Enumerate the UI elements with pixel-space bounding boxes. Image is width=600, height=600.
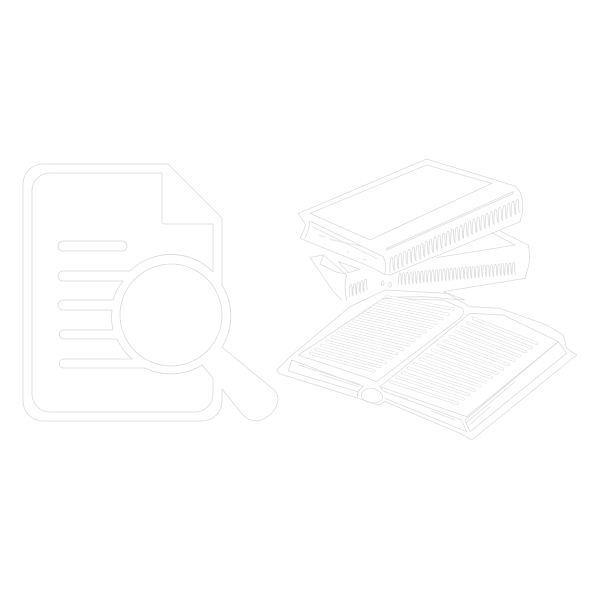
fore-edge lettering [467, 382, 515, 424]
left page outline [298, 298, 463, 382]
top book cover panel [310, 165, 492, 240]
icon: document with magnifying glass [23, 164, 278, 421]
top book page edges [390, 199, 520, 273]
lower book spine fragment [387, 297, 463, 300]
top book spine lettering [313, 227, 377, 260]
edge lettering [298, 365, 455, 420]
top book cover edge strip [387, 192, 513, 250]
left page text lines [311, 297, 453, 371]
top book spine outline [305, 221, 386, 273]
open book binding loop [288, 360, 467, 432]
left page text line centres [311, 297, 453, 371]
icon: lower closed book [310, 231, 529, 300]
right page text line centres [391, 318, 537, 403]
magnifier lens [120, 264, 222, 366]
right page text lines [391, 318, 537, 403]
document outer outline with magnifier handle [23, 164, 278, 421]
heading line pill [58, 241, 127, 251]
right page outline [380, 313, 558, 417]
lower book page edges [349, 263, 516, 297]
icon: open book [277, 290, 577, 440]
top book outline [298, 159, 523, 275]
open book fore-edge pages [465, 342, 567, 432]
document inner outline with text lines [32, 173, 213, 412]
icon: closed book on top of stack [298, 159, 523, 275]
open book outer outline [277, 290, 577, 440]
lower book outline [310, 231, 529, 300]
lower book cover detail [320, 233, 515, 274]
